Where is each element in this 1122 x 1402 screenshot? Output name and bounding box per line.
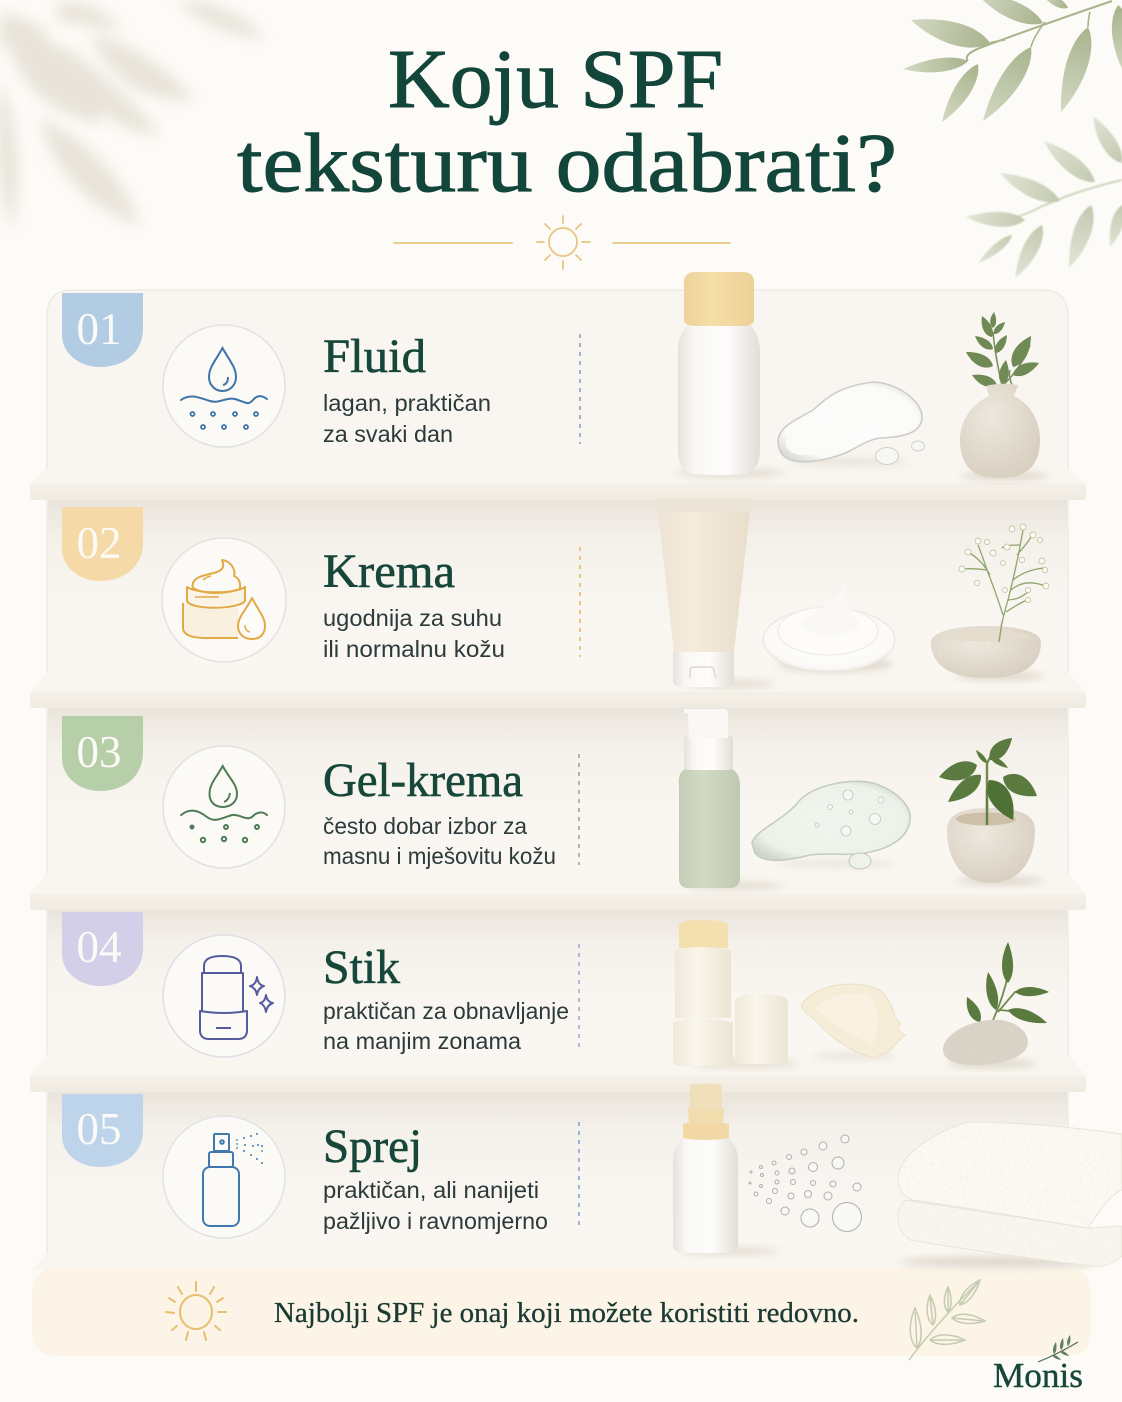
icon: spray bottle <box>163 1116 285 1238</box>
badge 01: 01 <box>76 304 122 354</box>
row 2: krema <box>62 498 1049 688</box>
description: Krema: ili normalnu kožu <box>323 636 505 662</box>
badge 01 <box>62 293 143 367</box>
product: stick and cap <box>673 920 800 1068</box>
towels <box>898 1122 1122 1267</box>
heading: Stik: Stik <box>323 941 400 994</box>
shelf 2 <box>30 672 1086 708</box>
heading: Sprej: Sprej <box>323 1120 422 1173</box>
badge 03: 03 <box>76 727 122 777</box>
description: Gel-krema: često dobar izbor za <box>323 813 527 839</box>
shelf unit back panel <box>47 290 1068 1262</box>
row 4: stik <box>62 912 1049 1068</box>
brand logo: Monis <box>993 1335 1083 1395</box>
badge 05 <box>62 1094 143 1167</box>
description: Sprej <box>323 1177 548 1234</box>
description: Sprej: pažljivo i ravnomjerno <box>323 1208 548 1234</box>
sun divider <box>394 216 730 269</box>
product: white bottle with yellow cap <box>675 272 785 477</box>
spray mist droplets <box>749 1135 862 1232</box>
badge 02: 02 <box>76 518 122 568</box>
heading: Fluid: Fluid <box>323 330 426 383</box>
pot with green plant <box>937 733 1044 884</box>
fluid texture puddle <box>778 382 924 466</box>
title: teksturu odabrati? <box>237 117 897 210</box>
badge 04 <box>62 912 143 986</box>
icon: droplet on skin, green <box>163 746 285 868</box>
brand logo: Monis: Monis <box>993 1356 1083 1395</box>
badge 05: 05 <box>76 1104 122 1154</box>
stone with leaves <box>943 942 1049 1068</box>
shelf 4 <box>30 1055 1086 1092</box>
stick texture smear <box>801 984 905 1059</box>
icon: droplet on skin <box>163 325 285 447</box>
footer banner <box>32 1268 1091 1360</box>
description: Sprej: praktičan, ali nanijeti <box>323 1177 539 1203</box>
vase with sprig <box>960 312 1049 480</box>
badge 03 <box>62 716 143 791</box>
heading: Krema: Krema <box>323 545 455 598</box>
row 5: sprej <box>62 1084 862 1254</box>
shelf 3 <box>30 873 1086 910</box>
soft leaf branch, right <box>966 112 1122 282</box>
description: Krema <box>323 605 505 662</box>
cream texture swirl <box>763 585 895 672</box>
leaf branch, top right <box>902 0 1122 127</box>
footer message: Najbolji SPF je onaj koji možete koristiti redovno. <box>274 1298 859 1329</box>
product: green pump bottle <box>679 709 785 890</box>
icon: stick with sparkles <box>163 935 285 1057</box>
product: cream tube <box>657 498 775 688</box>
gel texture puddle <box>752 781 910 869</box>
description: Gel-krema <box>323 813 556 869</box>
description: Stik: na manjim zonama <box>323 1028 521 1054</box>
wall shadows below the shelves <box>48 500 1067 1253</box>
icon: cream jar with droplet <box>162 538 286 662</box>
stone bowl with baby's breath <box>931 524 1049 680</box>
title <box>237 33 897 210</box>
icon: leaf sprig outline <box>909 1277 985 1360</box>
description: Fluid: za svaki dan <box>323 421 453 447</box>
description: Stik: praktičan za obnavljanje <box>323 998 569 1024</box>
description: Krema: ugodnija za suhu <box>323 605 502 631</box>
description: Fluid <box>323 390 491 447</box>
badge 04: 04 <box>76 922 122 972</box>
description: Stik <box>323 998 569 1054</box>
row 1: fluid <box>62 272 1049 480</box>
icon: sun <box>166 1282 226 1340</box>
blurred leaf shadow, top left <box>0 0 265 230</box>
row 3: gel-krema <box>62 709 1044 890</box>
badge 02 <box>62 507 143 581</box>
heading: Gel-krema: Gel-krema <box>323 754 523 807</box>
description: Gel-krema: masnu i mješovitu kožu <box>323 843 556 869</box>
product: spray bottle <box>673 1084 780 1254</box>
shelf 1 <box>30 469 1086 500</box>
shelf 5 base <box>32 1253 1090 1270</box>
description: Fluid: lagan, praktičan <box>323 390 491 416</box>
title: Koju SPF <box>388 33 723 126</box>
